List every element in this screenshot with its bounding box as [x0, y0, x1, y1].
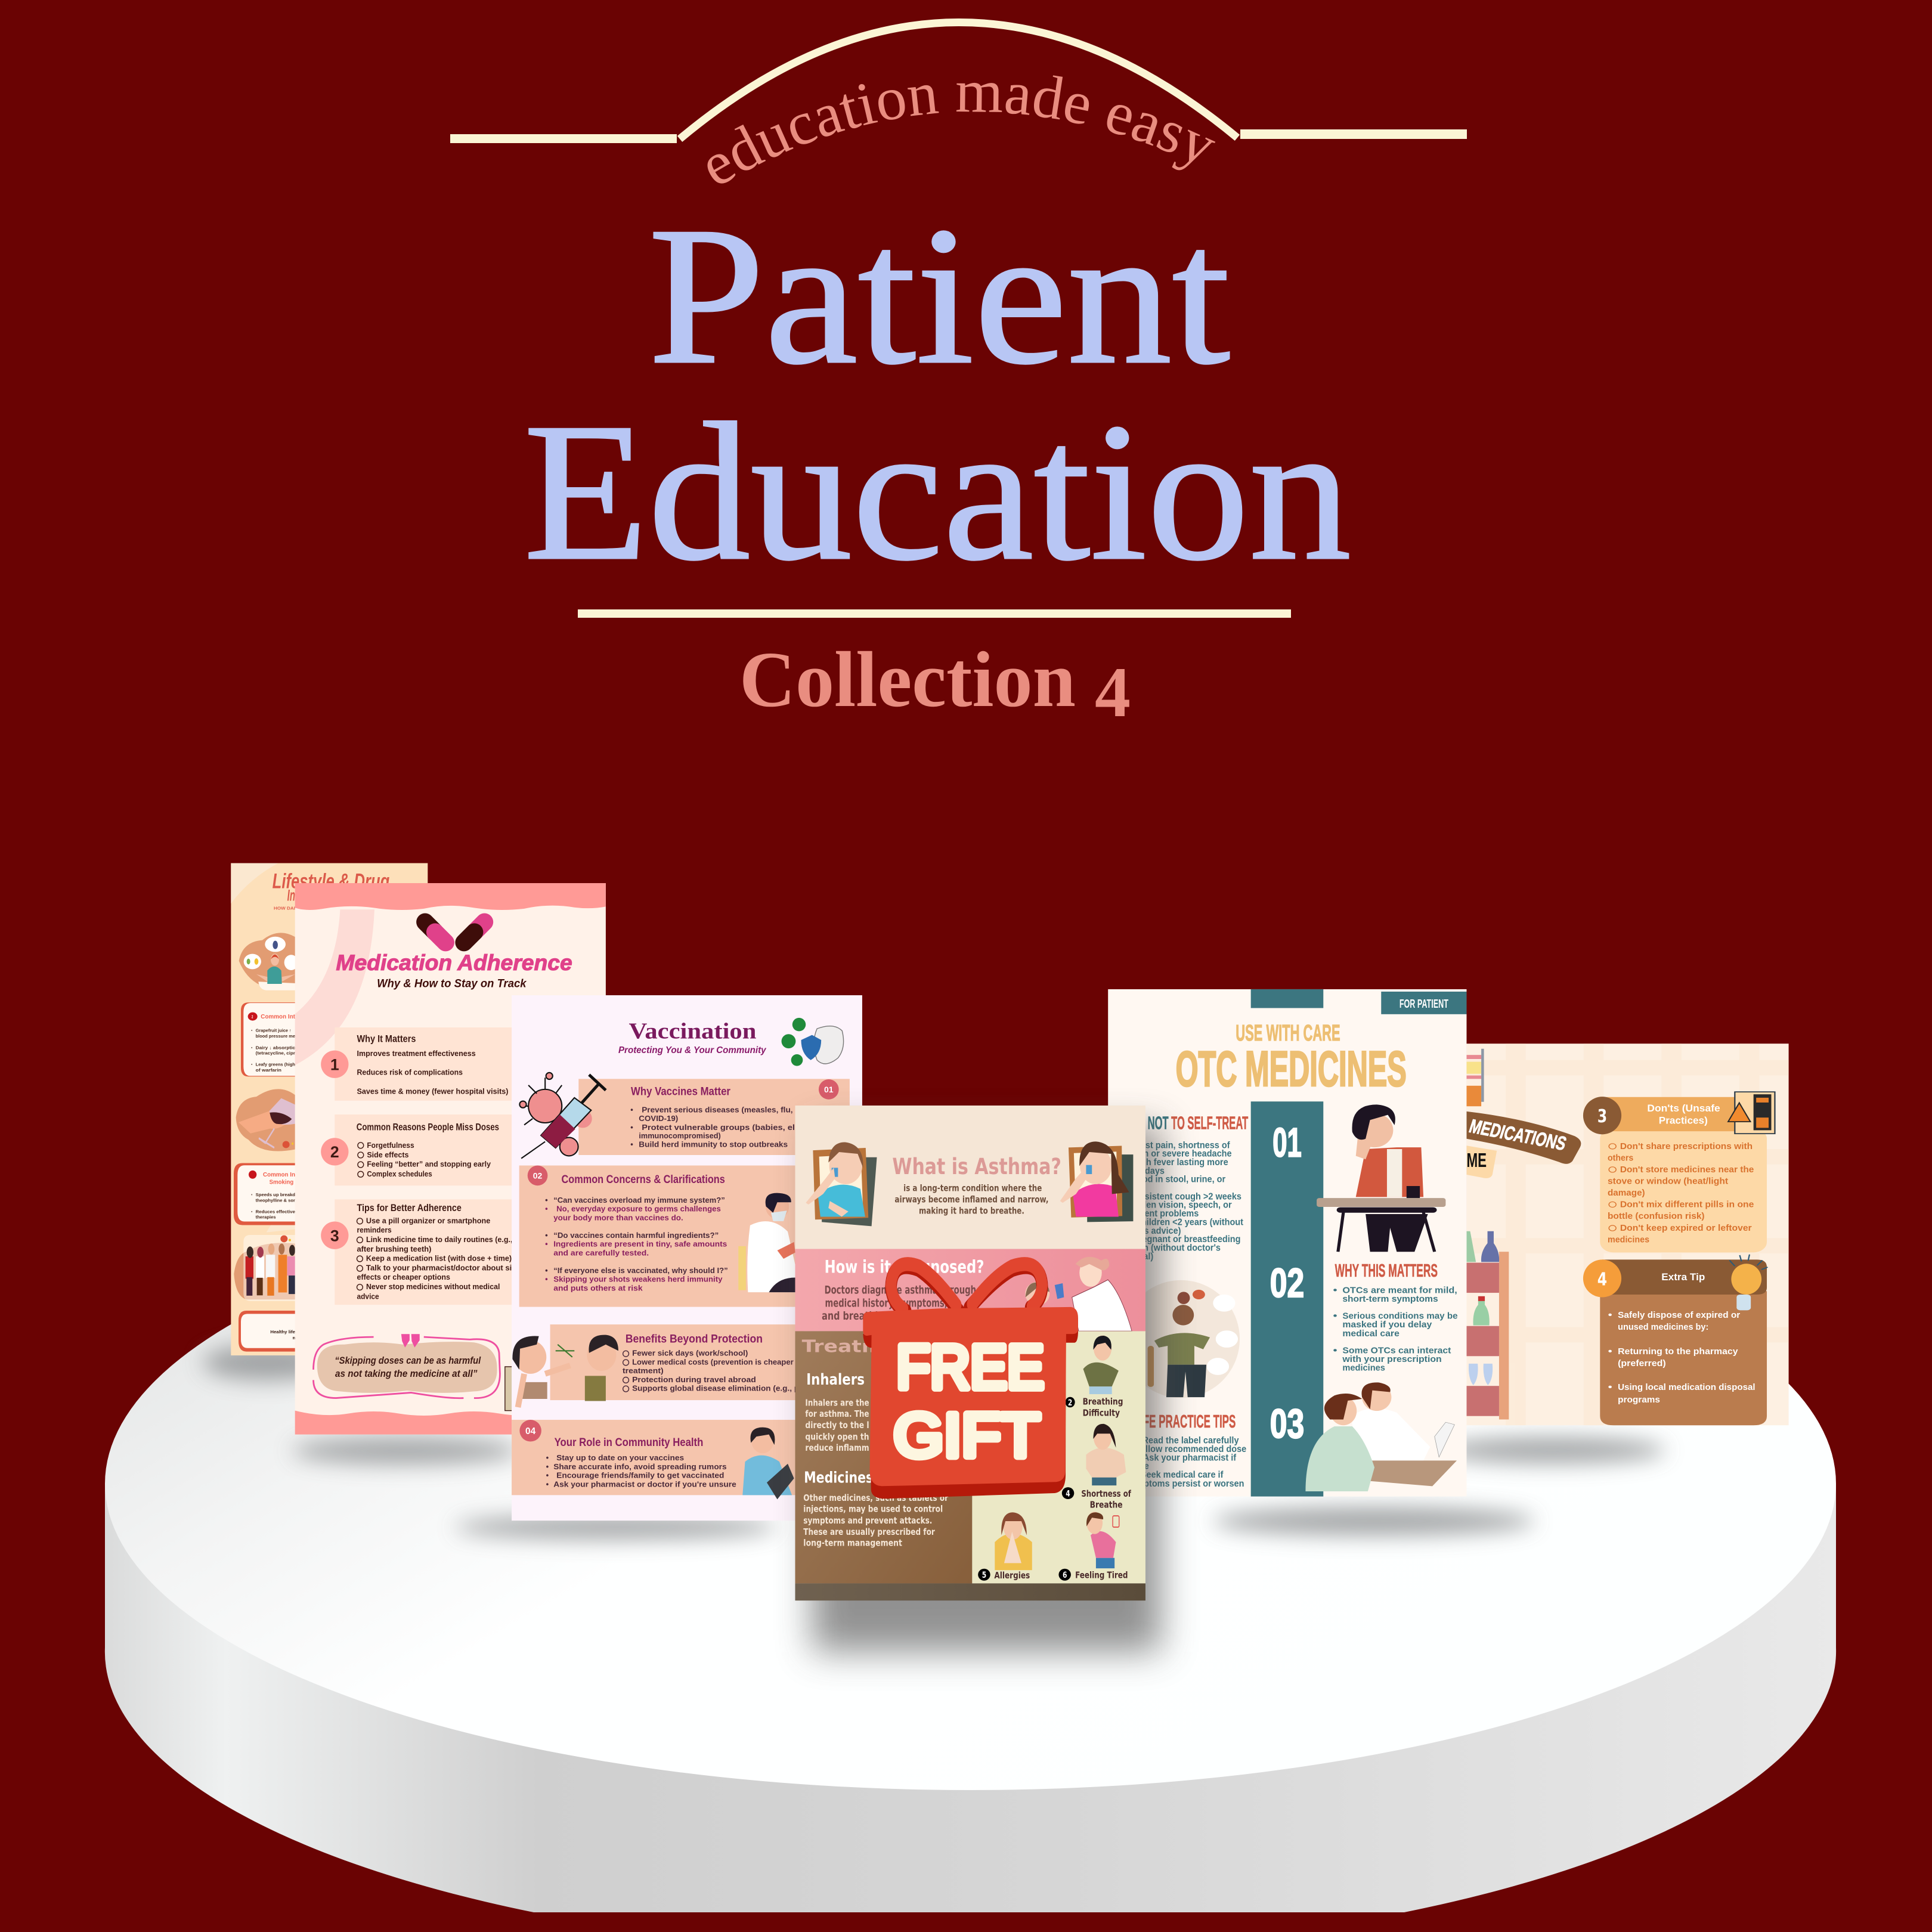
- panel: don'ts: Don't keep expired or leftover: [1620, 1222, 1752, 1233]
- panel: interaction 2: [241, 1002, 296, 1076]
- section: safe practice tips: unsure: [1120, 1461, 1149, 1472]
- callout: quote: “Skipping doses can be as harmful: [335, 1355, 481, 1366]
- icon: shield and viruses: [782, 1018, 844, 1066]
- title: Vaccination: [628, 1018, 756, 1044]
- intro text: making it hard to breathe.: [919, 1206, 1024, 1216]
- section: treatment: Medicines: [804, 1469, 873, 1487]
- symptom labels: Shortness of: [1081, 1488, 1132, 1499]
- illustration: allergies: [995, 1512, 1032, 1570]
- panel: extra tip: Returning to the pharmacy: [1618, 1346, 1738, 1356]
- box shadow edge: [863, 1330, 1078, 1498]
- symptom labels: 2: [1068, 1397, 1072, 1407]
- section: when not to self-treat: women (without doctor's: [1118, 1243, 1221, 1253]
- bow: [891, 1264, 1042, 1311]
- panel: tips: advice: [357, 1292, 379, 1301]
- panel: interaction 4: Reduces effective: [256, 1210, 296, 1215]
- section: safe practice tips: Read the label carefully: [1143, 1435, 1239, 1446]
- section: treatment: reduce inflamm: [805, 1443, 869, 1454]
- panel: why vaccines matter: Protect vulnerable groups (babies, elderly,: [642, 1123, 818, 1132]
- panel: interaction 2: •: [251, 1045, 252, 1051]
- illustration: shortness of breath: [1086, 1424, 1126, 1485]
- panel: closing note: [239, 1311, 296, 1352]
- section: why this matters: •: [1333, 1285, 1337, 1295]
- section: treatment: These are usually prescribed for: [803, 1527, 935, 1537]
- section: why this matters: masked if you delay: [1342, 1319, 1432, 1330]
- section: treatment: Other medicines, such as tablets or: [803, 1493, 948, 1503]
- section: treatment: Treatment: [802, 1337, 922, 1356]
- panel: why it matters: Why It Matters: [357, 1033, 416, 1045]
- illustration: lower shelf: [1466, 1231, 1509, 1419]
- panel: common reasons: Feeling “better” and stopping early: [367, 1160, 491, 1169]
- section: diagnosis: medical history, symptoms,: [825, 1296, 948, 1309]
- section: treatment: injections, may be used to control: [803, 1504, 943, 1515]
- panel: don'ts: Don't share prescriptions with: [1620, 1141, 1753, 1151]
- illustration: doctor and patient: [1305, 1382, 1457, 1491]
- panel: why vaccines matter: COVID-19): [639, 1114, 678, 1123]
- section: when not to self-treat: approval): [1114, 1251, 1153, 1262]
- section: when not to self-treat: Sudden or severe headache: [1117, 1148, 1232, 1159]
- panel: interaction 4: •: [251, 1193, 252, 1198]
- panel: interaction 4: theophylline & sor: [256, 1198, 296, 1203]
- panel: concerns: [519, 1166, 804, 1307]
- badge: for patient: [1381, 992, 1466, 1014]
- panel: don'ts: others: [1608, 1153, 1633, 1163]
- section: symptoms: [972, 1331, 1145, 1583]
- panel: why vaccines matter: •: [630, 1123, 633, 1132]
- heading ribbon: MEDICATIONS: [1467, 1115, 1569, 1154]
- gift text: FREE: [896, 1333, 1044, 1402]
- section: why this matters: OTCs are meant for mild,: [1342, 1285, 1457, 1295]
- illustration: breathing difficulty: [1083, 1335, 1119, 1394]
- section: when not to self-treat: Chest pain, shortness of: [1129, 1140, 1231, 1150]
- panel: interaction 4: Smoking: [270, 1178, 293, 1185]
- panel: why it matters: Reduces risk of complications: [357, 1068, 463, 1076]
- section: treatment: quickly open th: [805, 1432, 869, 1442]
- panel: interaction 2: •: [251, 1028, 252, 1033]
- panel: concerns: 02: [533, 1171, 543, 1180]
- step numbers: 02: [1270, 1260, 1304, 1306]
- box body: [863, 1307, 1078, 1486]
- section: when not to self-treat: than 3 days: [1117, 1166, 1165, 1176]
- symptom labels: Breathe: [1090, 1500, 1123, 1510]
- intro text: is a long-term condition where the: [903, 1183, 1042, 1194]
- symptom labels: Difficulty: [1083, 1408, 1120, 1419]
- panel: interaction 2: Grapefruit juice ↑: [256, 1028, 292, 1033]
- panel: benefits: Lower medical costs (prevention is cheaper than: [632, 1357, 812, 1366]
- illustration: coughing people: [512, 1335, 618, 1407]
- panel: interaction 2: 2: [252, 1015, 253, 1020]
- panel: extra tip: Using local medication disposal: [1618, 1382, 1755, 1392]
- panel: why it matters: 1: [330, 1056, 339, 1074]
- section: why this matters: WHY THIS MATTERS: [1335, 1260, 1438, 1281]
- panel: benefits: treatment): [623, 1366, 664, 1375]
- icon: clipboard: [505, 1367, 513, 1411]
- heading: HOW DAI: [274, 907, 296, 911]
- panel: tips: [321, 1199, 521, 1305]
- panel: benefits: Benefits Beyond Protection: [626, 1332, 763, 1345]
- panel: why vaccines matter: •: [630, 1140, 633, 1149]
- intro text: airways become inflamed and narrow,: [894, 1194, 1048, 1205]
- panel: concerns: Skipping your shots weakens herd immunity: [553, 1275, 723, 1284]
- section: safe practice tips: Seek medical care if: [1141, 1470, 1224, 1480]
- panel: concerns: •: [545, 1275, 548, 1284]
- title: Patient: Patient: [648, 186, 1231, 405]
- panel: don'ts: damage): [1608, 1187, 1645, 1198]
- panel: common reasons: Complex schedules: [367, 1170, 432, 1178]
- free gift badge: [863, 1264, 1078, 1498]
- card: OTC Medicines: SAFE PRACTICE TIPS: [1129, 1411, 1236, 1432]
- panel: tips: Link medicine time to daily routines (e.g.,: [366, 1236, 512, 1244]
- panel: why vaccines matter: •: [630, 1105, 633, 1114]
- illustration: doctor and patient: [1025, 1257, 1132, 1331]
- illustration: food and person: [239, 933, 298, 990]
- panel: don'ts: [1583, 1092, 1775, 1252]
- panel: extra tip: Extra Tip: [1661, 1272, 1705, 1283]
- bottom wavy band: [295, 1411, 606, 1435]
- panel: extra tip: (preferred): [1618, 1358, 1666, 1368]
- section: why this matters: [1333, 1260, 1458, 1373]
- heading: In: [287, 887, 295, 905]
- panel: community role: Ask your pharmacist or doctor if you're unsure: [553, 1479, 736, 1488]
- panel: why vaccines matter: Prevent serious diseases (measles, flu, HPV,: [642, 1105, 813, 1114]
- panel: benefits: [550, 1324, 816, 1400]
- illustration: wine glass: [236, 1089, 295, 1151]
- title: USE WITH CARE: [1236, 1020, 1340, 1046]
- illustration: doctor vaccinating: [738, 1193, 795, 1292]
- section: when not to self-treat: Sudden vision, speech, or: [1125, 1200, 1232, 1210]
- rule under title: [578, 609, 1291, 618]
- panel: why vaccines matter: immunocompromised): [639, 1131, 721, 1140]
- section: diagnosis: [795, 1249, 1145, 1331]
- subtitle: Protecting You & Your Community: [618, 1045, 767, 1055]
- section: diagnosis: Doctors diagnose asthma through: [825, 1284, 976, 1296]
- panel: concerns: •: [545, 1196, 548, 1205]
- section: safe practice tips: [1120, 1411, 1246, 1489]
- symptom labels: 5: [982, 1570, 986, 1580]
- section: when not to self-treat: doctor's advice): [1115, 1225, 1181, 1236]
- panel: tips: Never stop medicines without medical: [366, 1283, 500, 1291]
- section: when not to self-treat: Children <2 years (without: [1135, 1217, 1243, 1228]
- panel: interaction 2: Common Int: [261, 1013, 295, 1020]
- panel: interaction 4: Common In: [263, 1171, 295, 1178]
- footer bar: [795, 1583, 1145, 1600]
- panel: extra tip: Safely dispose of expired or: [1618, 1309, 1741, 1320]
- icon: bulb: [1729, 1255, 1768, 1310]
- heading ribbon: [1466, 1111, 1581, 1178]
- step numbers: [1270, 1120, 1304, 1447]
- section: why this matters: Serious conditions may be: [1342, 1311, 1458, 1321]
- section: diagnosis: and breathing tests: [822, 1309, 918, 1323]
- panel: extra tip: •: [1608, 1309, 1612, 1320]
- panel: why vaccines matter: Build herd immunity to stop outbreaks: [639, 1140, 788, 1149]
- card: Home Medications: [1466, 1044, 1789, 1425]
- heading: Lifestyle & Drug: [273, 869, 389, 893]
- panel: concerns: and puts others at risk: [553, 1283, 643, 1292]
- decorative arc with side lines: [450, 22, 1467, 143]
- panel: why it matters: Saves time & money (fewer hospital visits): [357, 1088, 508, 1096]
- card: Lifestyle and Drug Interactions: [231, 863, 428, 1355]
- heading ribbon: ME: [1466, 1150, 1487, 1172]
- panel: don'ts: stove or window (heat/light: [1608, 1176, 1728, 1186]
- panel: community role: Share accurate info, avoid spreading rumors: [553, 1462, 727, 1471]
- section: when not to self-treat: movement problems: [1114, 1209, 1199, 1219]
- panel: don'ts: Don't mix different pills in one: [1620, 1199, 1754, 1209]
- panel: interaction 2: of warfarin: [256, 1068, 281, 1073]
- panel: why it matters: Improves treatment effectiveness: [357, 1049, 476, 1058]
- illustration: woman with headache circle: [1122, 1280, 1240, 1398]
- panel: benefits: Supports global disease elimination (e.g., polio): [632, 1384, 816, 1393]
- card: Asthma: [795, 1106, 1145, 1600]
- gift text: [894, 1333, 1044, 1470]
- icon: hazard cabinet: [1728, 1092, 1775, 1134]
- panel: community role: [512, 1420, 804, 1499]
- card shadows on podium: [203, 1345, 1665, 1539]
- subtitle: 4: [1095, 652, 1131, 732]
- subtitle: Collection: [739, 635, 1076, 723]
- panel: interaction 4: Speeds up breakd: [256, 1193, 295, 1198]
- section: treatment: long-term management: [803, 1538, 902, 1549]
- panel: don'ts: Don't store medicines near the: [1620, 1164, 1754, 1174]
- panel: extra tip: programs: [1618, 1394, 1660, 1404]
- panel: interaction 4: therapies: [256, 1215, 276, 1220]
- card: Medication Adherence: [295, 883, 606, 1435]
- card: Vaccination: [512, 995, 862, 1521]
- panel: tips: 3: [330, 1227, 339, 1245]
- section: when not to self-treat: [1114, 1112, 1248, 1262]
- panel: tips: Use a pill organizer or smartphone: [366, 1216, 490, 1225]
- illustration: healthcare team: [234, 1235, 295, 1301]
- panel: extra tip: 4: [1597, 1270, 1607, 1290]
- panel: common reasons: Forgetfulness: [367, 1141, 414, 1150]
- panel: community role: 04: [525, 1426, 536, 1436]
- panel: extra tip: [1583, 1255, 1768, 1425]
- panel: concerns: Common Concerns & Clarifications: [562, 1173, 725, 1186]
- curved tagline: education made easy: [707, 75, 1215, 184]
- panel: community role: Your Role in Community Health: [555, 1436, 703, 1449]
- panel: why vaccines matter: 01: [824, 1085, 834, 1094]
- panel: don'ts: 3: [1597, 1106, 1607, 1127]
- podium: [105, 1177, 1836, 1912]
- symptom labels: 4: [1066, 1488, 1070, 1498]
- illustration: syringe and virus: [519, 1073, 606, 1159]
- panel: interaction 4: •: [251, 1210, 252, 1215]
- panel: extra tip: •: [1608, 1382, 1612, 1392]
- panel: common reasons: Side effects: [367, 1151, 408, 1159]
- panel: don'ts: Don'ts (Unsafe: [1647, 1103, 1720, 1114]
- panel: don'ts: bottle (confusion risk): [1608, 1210, 1705, 1221]
- section: safe practice tips: symptoms persist or worsen: [1126, 1479, 1244, 1489]
- icon: shelf top: [1466, 1049, 1484, 1106]
- section: when not to self-treat: Pregnant or breastfeeding: [1133, 1234, 1241, 1244]
- illustration: girl with inhaler: [1060, 1141, 1133, 1222]
- panel: extra tip: •: [1608, 1346, 1612, 1356]
- panel: tips: after brushing teeth): [357, 1245, 431, 1253]
- illustration: tired woman at desk: [1317, 1104, 1445, 1252]
- panel: concerns: •: [545, 1240, 548, 1249]
- section: why this matters: with your prescription: [1342, 1354, 1442, 1364]
- panel: community role: •: [546, 1479, 549, 1488]
- panel: why it matters: [321, 1027, 515, 1101]
- shadow of asthma card: [812, 1127, 1161, 1652]
- panel: concerns: Ingredients are present in tiny, safe amounts: [553, 1240, 727, 1249]
- section: why this matters: medicines: [1342, 1363, 1385, 1373]
- intro text: [894, 1183, 1048, 1216]
- panel: concerns: •: [545, 1205, 548, 1213]
- panel: benefits: Protection during travel abroad: [632, 1375, 756, 1384]
- panel: extra tip: unused medicines by:: [1618, 1321, 1708, 1332]
- section: safe practice tips: Ask your pharmacist if: [1143, 1453, 1237, 1463]
- section: why this matters: •: [1333, 1345, 1337, 1355]
- panel: interaction 2: Leafy greens (high: [256, 1063, 295, 1067]
- panel: don'ts: Practices): [1659, 1116, 1708, 1126]
- panel: interaction 2: blood pressure me: [256, 1034, 296, 1039]
- section: diagnosis: How is it Diagnosed?: [825, 1258, 984, 1277]
- section: why this matters: short-term symptoms: [1342, 1293, 1438, 1304]
- panel: closing note: Healthy life: [270, 1330, 296, 1335]
- section: treatment: symptoms and prevent attacks.: [803, 1516, 932, 1527]
- section: treatment: for asthma. The: [805, 1409, 869, 1420]
- panel: tips: Keep a medication list (with dose + time): [366, 1254, 512, 1262]
- panel: why vaccines matter: Why Vaccines Matter: [631, 1086, 730, 1098]
- panel: interaction 2: Dairy ↓ absorptic: [256, 1045, 296, 1051]
- symptom labels: Breathing: [1083, 1397, 1123, 1407]
- section: when not to self-treat: Blood in stool, urine, or: [1128, 1174, 1225, 1185]
- badge: for patient: FOR PATIENT: [1400, 997, 1448, 1011]
- illustration: boy with inhaler: [806, 1143, 877, 1226]
- callout: quote: as not taking the medicine at all”: [335, 1368, 478, 1379]
- card: OTC Medicines: OTC MEDICINES: [1176, 1041, 1407, 1097]
- icon: pills: [425, 922, 484, 943]
- heading: [273, 869, 389, 911]
- title: Education: Education: [524, 382, 1351, 601]
- panel: interaction 2: •: [251, 1063, 252, 1067]
- section: why this matters: •: [1333, 1311, 1337, 1321]
- panel: community role: •: [546, 1462, 549, 1471]
- panel: common reasons: Common Reasons People Miss Doses: [357, 1122, 499, 1133]
- panel: common reasons: [321, 1114, 515, 1185]
- panel: community role: Encourage friends/family to get vaccinated: [556, 1471, 724, 1480]
- panel: closing note: m: [293, 1336, 295, 1341]
- section: treatment: [795, 1331, 972, 1583]
- panel: benefits: Fewer sick days (work/school): [632, 1349, 748, 1358]
- panel: tips: reminders: [357, 1226, 392, 1234]
- panel: concerns: “Can vaccines overload my immune system?”: [553, 1196, 725, 1205]
- card: OTC Medicines: [1108, 989, 1466, 1497]
- section: treatment: Inhalers: [806, 1371, 865, 1389]
- panel: community role: •: [546, 1471, 549, 1480]
- panel: concerns: and are carefully tested.: [553, 1248, 649, 1257]
- section: why this matters: medical care: [1342, 1328, 1400, 1338]
- panel: interaction 2: (tetracycline, cipr: [256, 1051, 296, 1056]
- symptom labels: 6: [1063, 1570, 1067, 1580]
- panel: common reasons: 2: [330, 1143, 339, 1161]
- section: when not to self-treat: NOT: [1148, 1112, 1169, 1134]
- panel: tips: Talk to your pharmacist/doctor about side: [366, 1264, 521, 1272]
- gift text: GIFT: [894, 1401, 1040, 1470]
- section: treatment: Inhalers are the: [805, 1398, 869, 1408]
- step numbers: 03: [1270, 1401, 1304, 1447]
- panel: concerns: your body more than vaccines do.: [553, 1213, 683, 1222]
- title block: [450, 18, 1467, 732]
- panel: concerns: “If everyone else is vaccinated, why should I?”: [553, 1266, 728, 1275]
- panel: concerns: •: [545, 1266, 548, 1275]
- panel: don'ts: medicines: [1608, 1234, 1649, 1244]
- step numbers: 01: [1272, 1120, 1302, 1165]
- section: when not to self-treat: High fever lasting more: [1132, 1157, 1228, 1168]
- illustration: feeling tired: [1086, 1512, 1119, 1568]
- symptom labels: [978, 1397, 1132, 1581]
- panel: tips: Tips for Better Adherence: [357, 1202, 462, 1213]
- panel: community role: Stay up to date on your vaccines: [556, 1453, 684, 1462]
- panel: tips: effects or cheaper options: [357, 1273, 450, 1281]
- symptom labels: Allergies: [994, 1571, 1030, 1581]
- symptom labels: Feeling Tired: [1075, 1570, 1128, 1581]
- section: treatment: directly to the l: [805, 1420, 869, 1431]
- title: What is Asthma?: [892, 1153, 1061, 1179]
- panel: concerns: “Do vaccines contain harmful ingredients?”: [553, 1231, 719, 1240]
- panel: community role: •: [546, 1453, 549, 1462]
- section: why this matters: Some OTCs can interact: [1342, 1345, 1451, 1355]
- panel: why vaccines matter: [578, 1079, 850, 1155]
- title: Medication Adherence: [336, 950, 572, 975]
- section: when not to self-treat: Persistent cough >2 weeks: [1131, 1191, 1241, 1202]
- title: [1176, 1020, 1407, 1097]
- subtitle: Why & How to Stay on Track: [377, 978, 527, 990]
- card: OTC Medicines: TO SELF-TREAT: [1171, 1112, 1248, 1134]
- panel: interaction 4: [234, 1163, 296, 1225]
- callout: quote: [314, 1334, 500, 1398]
- section: safe practice tips: Follow recommended dose: [1135, 1444, 1246, 1454]
- panel: concerns: No, everyday exposure to germs challenges: [556, 1205, 721, 1213]
- panel: concerns: •: [545, 1231, 548, 1240]
- top wavy band: [295, 883, 606, 910]
